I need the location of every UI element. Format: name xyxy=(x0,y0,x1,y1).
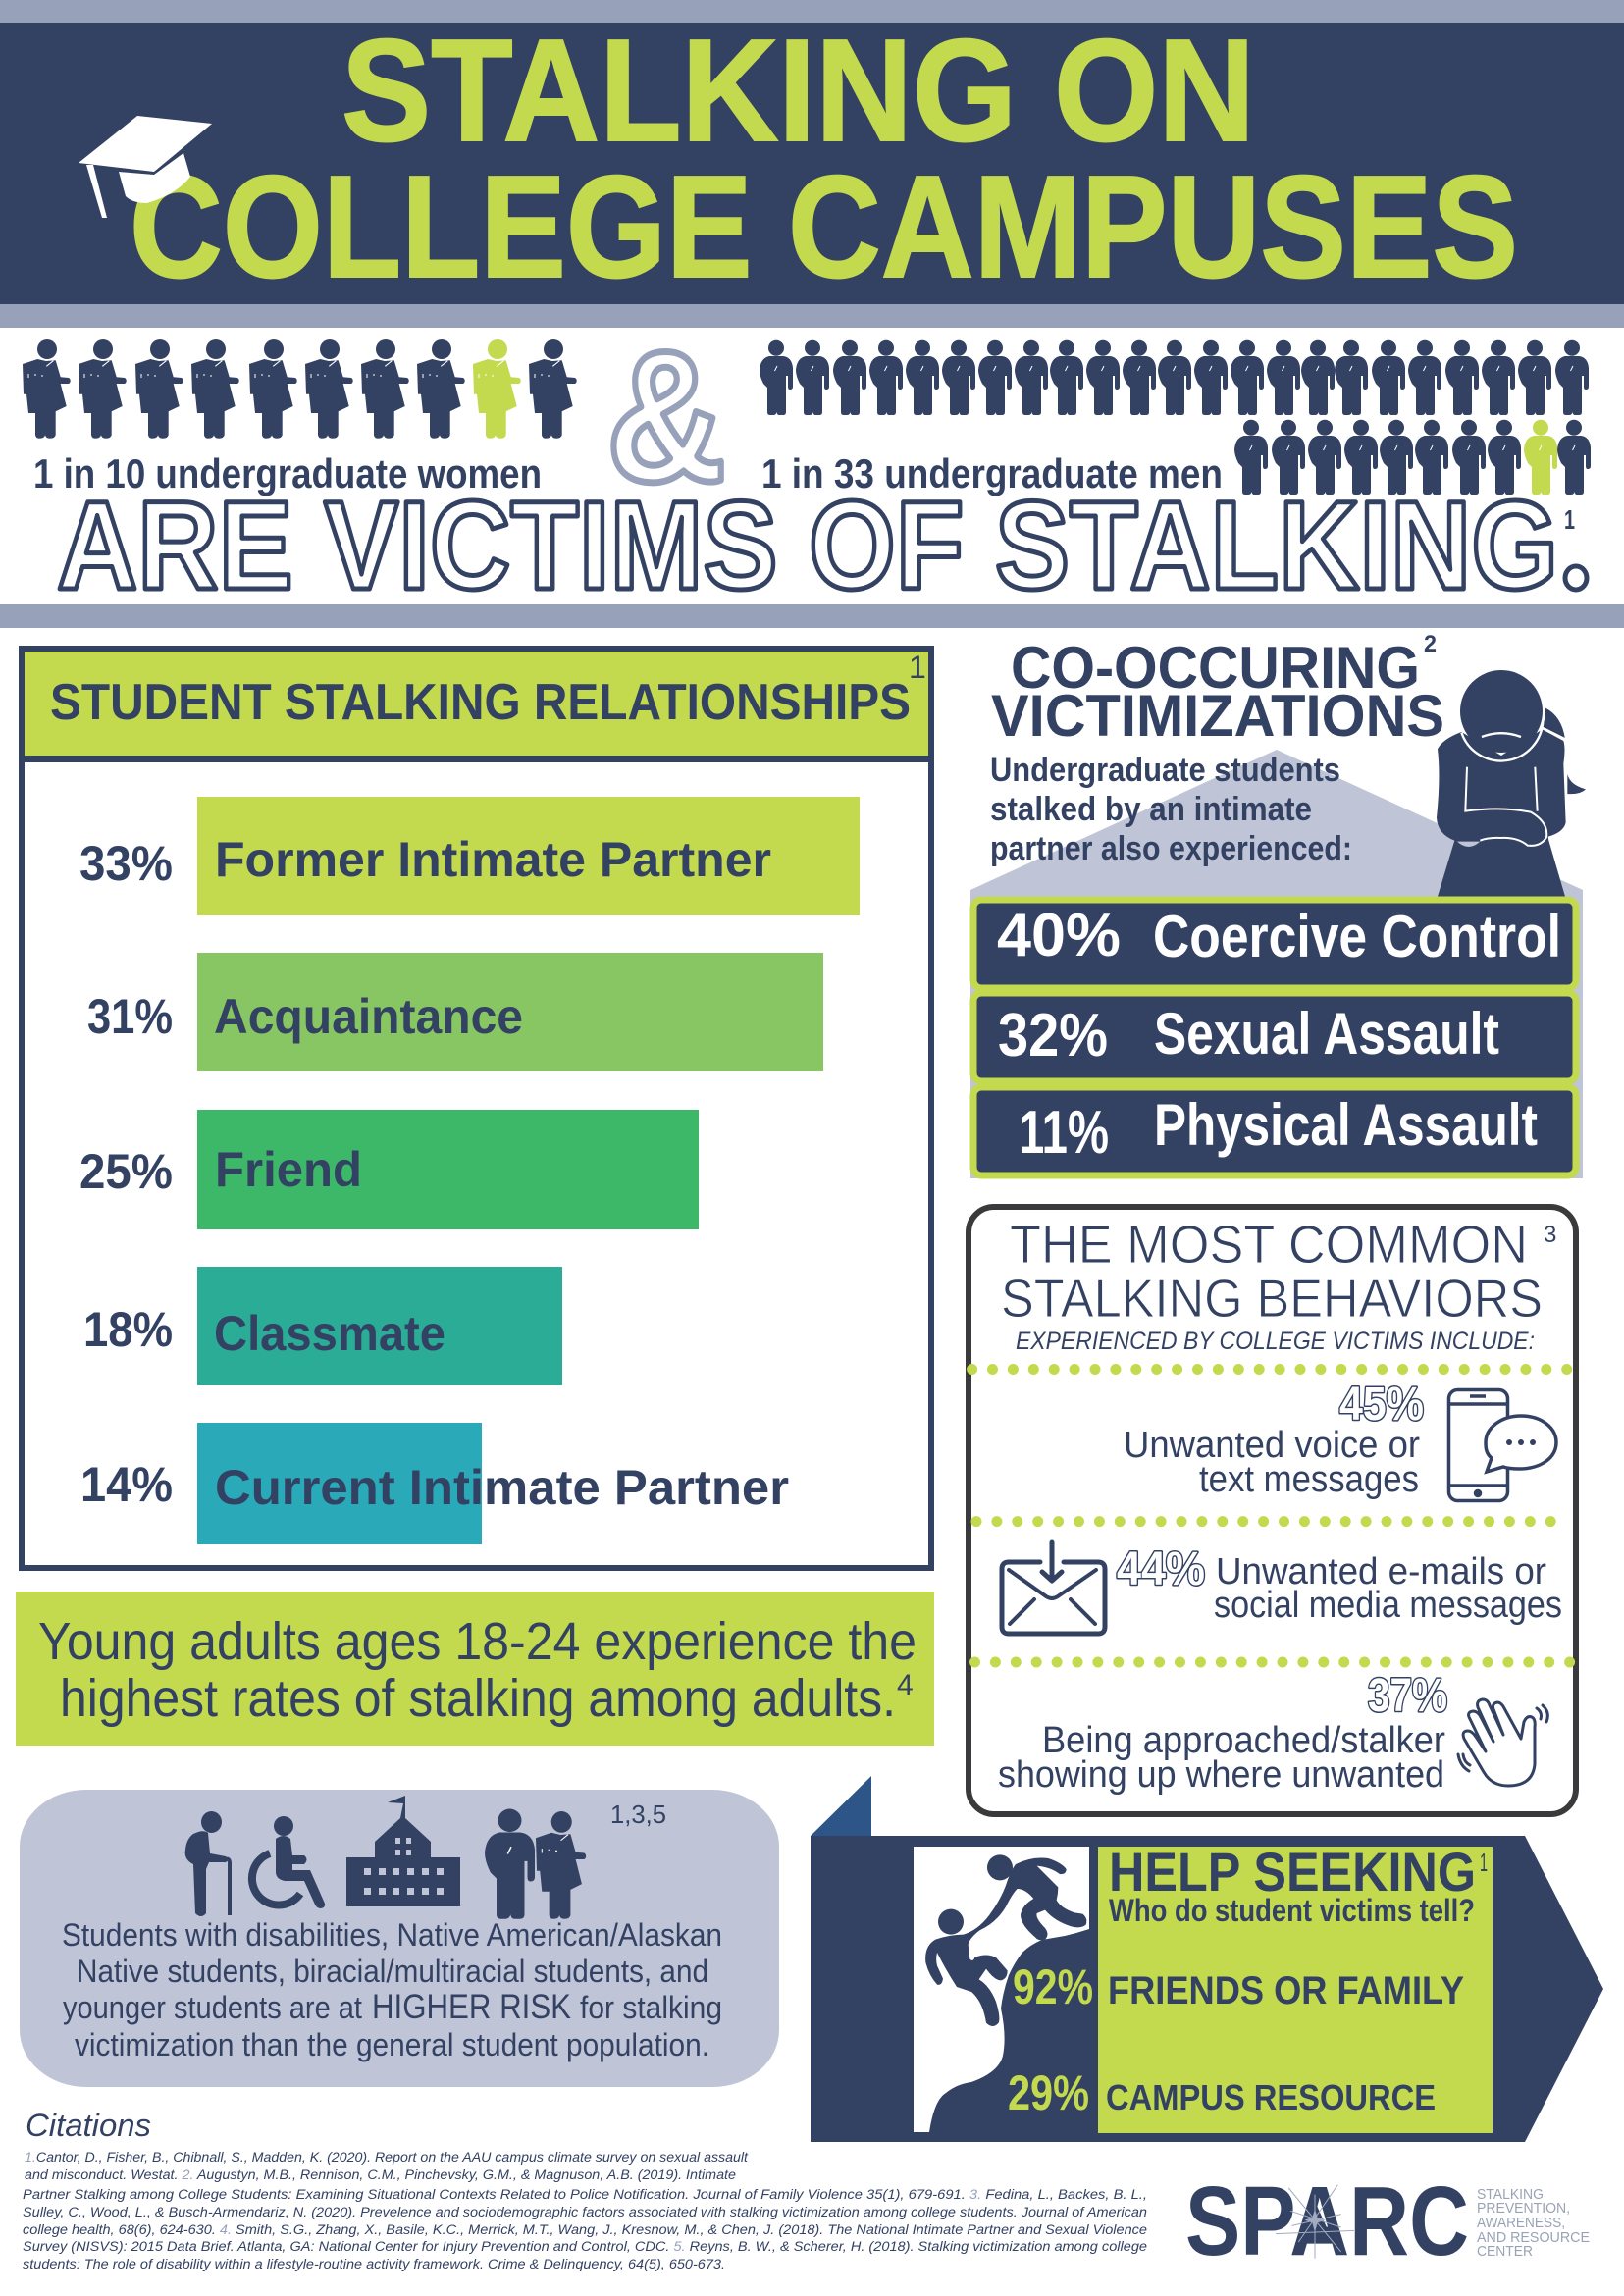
stat: sexual assault xyxy=(973,993,1576,1081)
citations: Citations xyxy=(26,2108,151,2143)
text: higher risk: HIGHER RISK xyxy=(372,1988,571,2026)
bar: acquaintance: Acquaintance xyxy=(214,989,523,1044)
stat: campus resource: CAMPUS RESOURCE xyxy=(1106,2077,1436,2117)
stat: sexual assault: 32% xyxy=(998,1002,1108,1070)
citation marker: 1,3,5 xyxy=(610,1800,666,1829)
bar: current intimate partner xyxy=(80,1423,789,1544)
item: being approached: Being approached/stalker xyxy=(1042,1720,1445,1761)
stat: coercive control: Coercive Control xyxy=(1153,904,1561,969)
pictogram: 1 in 33 men xyxy=(760,340,1591,495)
stat: friends or family xyxy=(1013,1959,1464,2014)
heading: EXPERIENCED BY COLLEGE VICTIMS INCLUDE: xyxy=(1016,1328,1535,1355)
ampersand: & xyxy=(606,313,726,521)
icon: wheelchair xyxy=(252,1816,325,1908)
bar: classmate: Classmate xyxy=(214,1306,445,1361)
label: men statistic: 1 in 33 undergraduate men xyxy=(761,450,1223,496)
citations: college health, 68(6), 624-630. 4. Smith, S.G., Zhang, X., Basile, K.C., Merrick, M.T., Wang, J., Kresnow, M., & Chen, J. (2018). The National Intimate Partner and Sexual Violence xyxy=(23,2222,1147,2237)
heading: THE MOST COMMON xyxy=(1010,1214,1528,1275)
citations: Survey (NISVS): 2015 Data Brief. Atlanta, GA: National Center for Injury Prevention and Control, CDC. 5. Reyns, B. W., & Scherer, H. (2018). Stalking victimization among college xyxy=(23,2239,1147,2254)
heading: 3 xyxy=(1544,1222,1556,1248)
logo descriptor xyxy=(1477,2186,1590,2260)
heading: VICTIMIZATIONS xyxy=(991,683,1444,749)
heading: Who do student victims tell? xyxy=(1109,1893,1475,1928)
title: STALKING ON xyxy=(341,10,1255,172)
item: e-mails or social media messages: Unwanted e-mails or xyxy=(1216,1551,1546,1592)
text: higher risk: younger students are at xyxy=(63,1990,362,2025)
panel: help seeking arrow xyxy=(811,1776,1603,2142)
bar: former intimate partner xyxy=(79,797,860,915)
heading: STUDENT STALKING RELATIONSHIPS xyxy=(50,674,911,731)
logo descriptor: STALKING xyxy=(1477,2186,1544,2203)
stat: campus resource xyxy=(1008,2065,1436,2120)
heading: 1 xyxy=(909,650,926,685)
icon: school building xyxy=(346,1796,460,1906)
item: being approached: showing up where unwanted xyxy=(998,1754,1444,1796)
callout: young adults: Young adults ages 18-24 experience the xyxy=(38,1612,917,1671)
stat: physical assault: Physical Assault xyxy=(1154,1092,1538,1158)
citations: and misconduct. Westat. 2. Augustyn, M.B., Rennison, C.M., Pinchevsky, G.M., & Magnuson, A.B. (2019). Intimate xyxy=(25,2167,736,2182)
item: e-mails or social media messages: social media messages xyxy=(1214,1585,1562,1626)
callout: young adults xyxy=(16,1592,934,1746)
text: higher risk: victimization than the general student population. xyxy=(75,2027,709,2062)
bar: current intimate partner: Current Intimate Partner xyxy=(215,1460,789,1515)
bar: current intimate partner: 14% xyxy=(80,1457,173,1512)
bar: friend: Friend xyxy=(215,1142,362,1197)
citations: 1.Cantor, D., Fisher, B., Chibnall, S., Madden, K. (2020). Report on the AAU campus climate survey on sexual assault xyxy=(25,2150,749,2165)
bar: friend xyxy=(79,1110,699,1229)
label: women statistic: 1 in 10 undergraduate women xyxy=(33,450,542,496)
heading xyxy=(1109,1841,1488,1928)
icon: students xyxy=(485,1809,586,1919)
stat: physical assault xyxy=(973,1087,1576,1175)
heading: 2 xyxy=(1424,631,1437,657)
bar: former intimate partner: 33% xyxy=(79,836,173,891)
text: higher risk: for stalking xyxy=(580,1990,722,2025)
logo: SPARC: SPARC xyxy=(1185,2166,1469,2276)
logo descriptor: CENTER xyxy=(1477,2243,1533,2260)
citations: students: The role of disability within a lifestyle-routine activity framework. Crime & Delinquency, 64(5), 650-673. xyxy=(23,2257,725,2271)
icon: older person with cane xyxy=(185,1811,230,1916)
icon: waving hand xyxy=(1458,1699,1547,1786)
logo descriptor: AWARENESS, xyxy=(1477,2215,1565,2231)
item: being approached: 37% xyxy=(1368,1670,1447,1722)
heading xyxy=(25,650,928,762)
pictogram: 1 in 10 women xyxy=(23,339,577,439)
item: voice or text messages: 45% xyxy=(1339,1379,1424,1431)
text: higher risk: Native students, biracial/multiracial students, and xyxy=(77,1954,708,1989)
icon: envelope with arrow xyxy=(1002,1542,1105,1634)
bar: classmate xyxy=(83,1267,562,1385)
subheading xyxy=(990,752,1352,867)
heading: STALKING BEHAVIORS xyxy=(1001,1268,1543,1329)
item: voice or text messages: text messages xyxy=(1199,1459,1419,1500)
heading xyxy=(991,631,1444,749)
icon: climbers on hill xyxy=(925,1854,1098,2132)
bar: former intimate partner: Former Intimate Partner xyxy=(215,832,771,887)
subheading: Undergraduate students xyxy=(990,752,1340,789)
stat: physical assault: 11% xyxy=(1019,1099,1109,1167)
panel: most common stalking behaviors xyxy=(969,1207,1576,1814)
item: e-mails or social media messages xyxy=(1002,1542,1562,1634)
divider band xyxy=(0,604,1624,628)
icon: phone with message bubble xyxy=(1448,1389,1556,1501)
house background xyxy=(970,750,1583,1178)
title xyxy=(130,10,1518,308)
stat: coercive control: 40% xyxy=(997,902,1121,969)
stat: friends or family: 92% xyxy=(1013,1959,1093,2014)
icon: sad seated figure xyxy=(1437,670,1586,897)
heading: HELP SEEKING xyxy=(1109,1841,1476,1903)
text: higher risk: Students with disabilities, Native American/Alaskan xyxy=(62,1917,722,1953)
item: voice or text messages xyxy=(1124,1379,1556,1501)
item: being approached xyxy=(998,1670,1547,1796)
callout: young adults: highest rates of stalking among adults. xyxy=(60,1669,896,1728)
subheading: stalked by an intimate xyxy=(990,791,1312,828)
panel: co-occurring victimizations xyxy=(970,631,1586,1178)
icon: graduation cap xyxy=(79,116,212,218)
stat: sexual assault: Sexual Assault xyxy=(1154,1001,1499,1067)
headline: are victims of stalking: 1 xyxy=(1564,504,1575,535)
heading: 1 xyxy=(1480,1848,1488,1877)
panel: student stalking relationships xyxy=(22,649,931,1568)
bar: classmate: 18% xyxy=(83,1302,173,1357)
citations xyxy=(23,2108,1147,2271)
item: voice or text messages: Unwanted voice or xyxy=(1124,1425,1420,1466)
heading xyxy=(1001,1214,1556,1355)
item: e-mails or social media messages: 44% xyxy=(1117,1543,1205,1595)
text: higher risk xyxy=(62,1917,722,2062)
citations: Partner Stalking among College Students: Examining Situational Contexts Related to Police Notification. Journal of Family Violence 35(1), 679-691. 3. Fedina, L., Backes, B. L., xyxy=(23,2187,1147,2202)
subheading: partner also experienced: xyxy=(990,830,1352,867)
logo descriptor: PREVENTION, xyxy=(1477,2200,1570,2217)
bar: acquaintance xyxy=(87,953,823,1071)
logo descriptor: AND RESOURCE xyxy=(1477,2229,1590,2246)
bar: friend: 25% xyxy=(79,1144,173,1199)
stat: friends or family: FRIENDS OR FAMILY xyxy=(1108,1969,1464,2012)
icon: logo star xyxy=(1276,2185,1354,2259)
header banner xyxy=(0,0,1624,328)
heading: CO-OCCURING xyxy=(1011,635,1420,701)
citations: Sulley, C., Wood, L., & Busch-Armendariz, N. (2020). Prevelence and sociodemographic factors associated with stalking victimization among college students. Journal of American xyxy=(23,2205,1147,2219)
bar: acquaintance: 31% xyxy=(87,989,173,1044)
stat: campus resource: 29% xyxy=(1008,2065,1089,2120)
callout: young adults: 4 xyxy=(897,1669,914,1701)
stat: coercive control xyxy=(973,900,1576,988)
panel: higher risk groups xyxy=(20,1790,779,2087)
